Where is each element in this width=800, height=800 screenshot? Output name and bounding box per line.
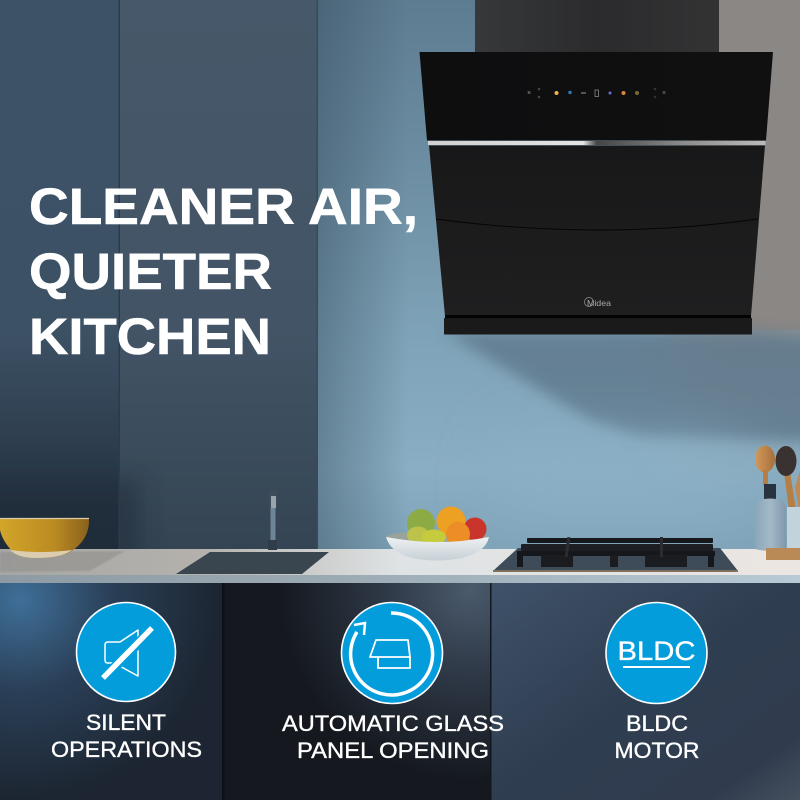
hood bottom bar <box>444 315 752 334</box>
burner grates <box>517 537 715 567</box>
vase <box>755 484 786 551</box>
countertop <box>0 549 800 583</box>
title: KITCHEN <box>29 308 271 365</box>
kitchen wall background <box>0 0 800 570</box>
sink <box>176 552 329 574</box>
feature: silent operations <box>51 602 202 762</box>
icon: rotating glass panel <box>342 602 442 704</box>
hood panel crease <box>436 219 758 230</box>
hood brand logo: Midea <box>587 298 611 308</box>
label: BLDC motor <box>614 711 700 763</box>
range hood <box>420 0 773 334</box>
label: silent operations: OPERATIONS <box>51 737 202 762</box>
title: CLEANER AIR, <box>29 178 418 235</box>
hood lower glass panel <box>429 146 765 316</box>
label: BLDC motor: MOTOR <box>614 738 700 763</box>
label: automatic glass panel opening <box>282 711 504 763</box>
hood chimney <box>475 0 719 53</box>
hood silver strip <box>428 141 766 145</box>
hood touch controls: × <box>662 90 666 97</box>
gas cooktop <box>493 537 738 572</box>
hood upper glass panel <box>420 52 773 140</box>
fruit bowl <box>386 506 489 560</box>
title: QUIETER <box>29 243 272 300</box>
feature: automatic glass panel opening <box>282 602 504 763</box>
icon: BLDC badge: BLDC <box>618 636 696 666</box>
icon: BLDC badge <box>606 602 707 704</box>
label: silent operations: SILENT <box>86 710 166 735</box>
lower cabinets <box>0 583 800 800</box>
utensil holder <box>787 507 800 550</box>
cutting board <box>766 548 800 560</box>
label: silent operations <box>51 710 202 762</box>
feature: BLDC motor <box>606 602 707 763</box>
title <box>29 178 418 365</box>
yellow bowl <box>0 518 89 558</box>
label: automatic glass panel opening: PANEL OPENING <box>297 738 489 763</box>
hood touch controls: × <box>527 90 531 97</box>
label: BLDC motor: BLDC <box>626 711 688 736</box>
label: automatic glass panel opening: AUTOMATIC GLASS <box>282 711 504 736</box>
wooden spoons <box>755 446 800 510</box>
icon: muted speaker <box>76 602 176 702</box>
faucet <box>268 490 277 550</box>
utensils, vase and board <box>755 446 800 560</box>
hood touch controls <box>527 88 666 98</box>
